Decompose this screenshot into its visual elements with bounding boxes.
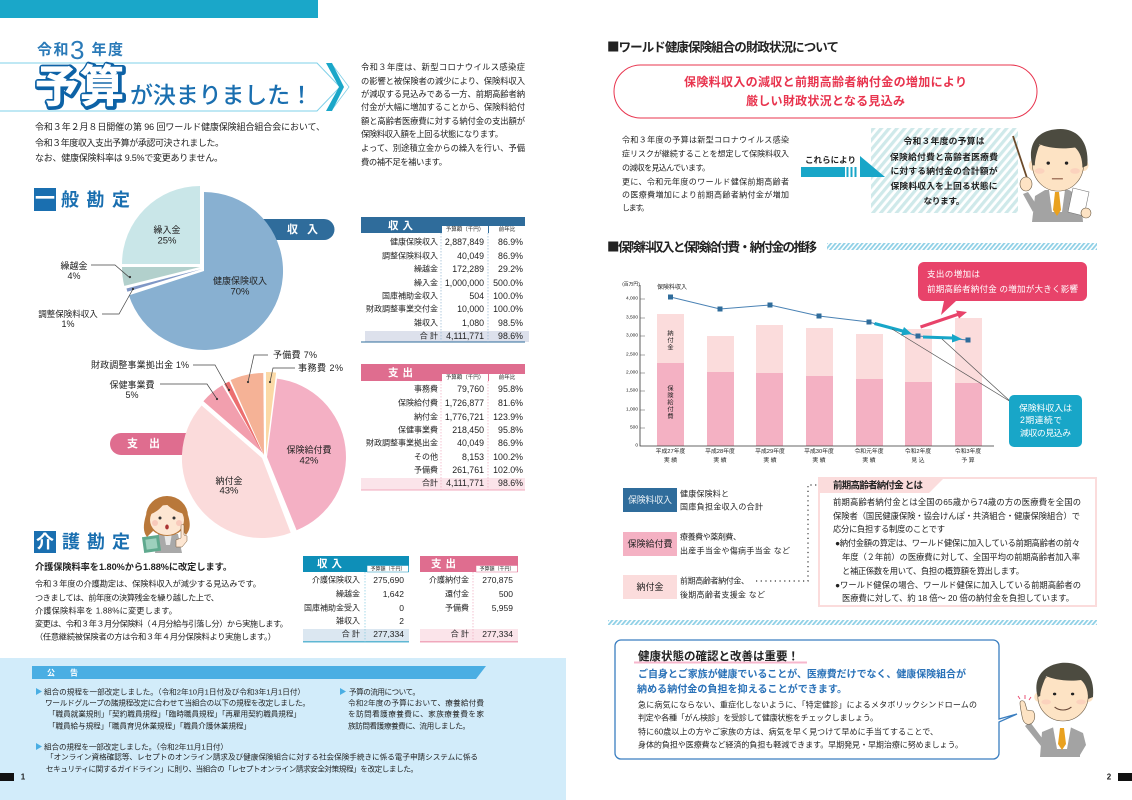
x axis labels: 実 績 <box>763 456 777 464</box>
bar labels: 保 <box>667 384 674 392</box>
right intro text: が減収する見込みである一方、前期高齢者納 <box>361 89 525 99</box>
intro text: 令和３年度収入支出予算が承認可決されました。 <box>35 137 224 148</box>
pie labels: expenditure: 保険給付費 <box>286 444 332 455</box>
pie labels: expenditure: 42% <box>299 456 319 466</box>
right intro text: 令和３年度は、新型コロナウイルス感染症 <box>361 62 525 72</box>
x axis labels: 平成28年度 <box>705 447 735 455</box>
legend: benefits term: 保険給付費 <box>628 538 672 549</box>
pie chart: revenue <box>38 186 283 350</box>
panel: public notices <box>0 658 566 800</box>
intro text <box>35 121 325 163</box>
table: expenditure: 95.8% <box>498 425 523 435</box>
pie labels: expenditure: 43% <box>219 486 239 496</box>
legend: contribution term: 納付金 <box>636 581 664 592</box>
x axis labels: 実 績 <box>862 456 876 464</box>
table: expenditure: 保険給付費 <box>398 398 438 408</box>
table: revenue: 合 計 <box>420 330 438 340</box>
heading: long-term care account: 護勘定 <box>62 532 130 552</box>
leader lines <box>892 329 1011 402</box>
table: care expenditure: 270,875 <box>482 575 513 585</box>
intro text: なお、健康保険料率は 9.5%で変更ありません。 <box>35 152 223 163</box>
axes: 2,000 <box>626 370 638 376</box>
bar labels: 付 <box>667 336 674 344</box>
finance text: 更に、令和元年度のワールド健保前期高齢者 <box>622 176 789 186</box>
panel: explanation of contribution <box>818 477 1096 606</box>
explanation title tab: 前期高齢者納付金 とは <box>833 480 923 492</box>
headline: yosan: 予算 <box>35 62 124 112</box>
axes: 1,500 <box>626 388 638 394</box>
icon: woman character <box>142 496 190 553</box>
table: revenue: 500.0% <box>493 278 523 288</box>
care text block <box>35 561 288 642</box>
axes: 4,000 <box>626 296 638 302</box>
heading: general account <box>34 188 130 211</box>
heading: general account: 般勘定 <box>61 190 130 210</box>
notice: rule revisions 1: ワールドグループの諸規程改定に合わせて当組合の以下の規程を改定しました。 <box>45 698 310 708</box>
hatched conclusion box: 令和３年度の予算は <box>904 135 985 146</box>
notice: rule revisions 2: セキュリティに関するガイドライン」に則り、当組合の「レセプトオンライン請求安全対策規程」を改定しました。 <box>46 764 418 774</box>
axes: 3,500 <box>626 314 638 320</box>
table: revenue: 4,111,771 <box>446 331 484 341</box>
axes: 1,000 <box>626 406 638 412</box>
right intro text: よって、別途積立金からの繰入を行い、予備 <box>361 143 525 153</box>
intro text: 令和３年２月８日開催の第 96 回ワールド健康保険組合組合会において、 <box>35 121 325 132</box>
title block <box>0 35 349 112</box>
arrow: as a result <box>801 155 885 177</box>
bar labels: 費 <box>667 412 674 420</box>
page number 1: 1 <box>21 772 26 782</box>
care text block: 介護保険料率を 1.88%に変更します。 <box>35 606 177 616</box>
table: expenditure: 予備費 <box>414 464 438 474</box>
table: expenditure: 前年比 <box>499 373 516 381</box>
pie labels: revenue: 25% <box>157 236 177 246</box>
notice: rule revisions 1: 「職員就業規則」「契約職員規程」「臨時職員規程」「再雇用契約職員規程」 <box>48 708 301 718</box>
callout body: 急に病気にならない、重症化しないように、「特定健診」によるメタボリックシンドロームの <box>638 700 977 710</box>
x axis labels: 平成29年度 <box>755 447 785 455</box>
notice: rule revisions 2: 「オンライン資格確認等、レセプトのオンライン請求及び健康保険組合に対する社会保険手続きに係る電子申請システムに係る <box>46 752 478 762</box>
chart: revenue and expense trend <box>622 262 1087 464</box>
table: care revenue: 277,334 <box>373 629 404 639</box>
arrow: as a result: これらにより <box>805 155 856 165</box>
notice: budget transfer: を訪問看護療養費に、家族療養費を家 <box>348 708 484 718</box>
table: revenue: 雑収入 <box>414 318 438 328</box>
table: revenue: 98.6% <box>498 331 523 341</box>
pie labels: expenditure <box>91 349 343 496</box>
legend: revenue term: 健康保険料と <box>680 488 729 498</box>
revenue line: 保険料収入 <box>657 283 687 291</box>
finance text: 症リスクが継続することを想定して保険料収入 <box>622 148 789 158</box>
pie labels: revenue: 4% <box>67 271 81 281</box>
axes: (百万円) <box>622 282 640 288</box>
page number 2 <box>1107 772 1132 782</box>
pie labels: expenditure: 財政調整事業拠出金 1% <box>91 359 189 370</box>
callout: revenue: 2期連続で <box>1020 414 1062 425</box>
hatched conclusion box: なります。 <box>924 196 964 206</box>
pie labels: revenue: 繰入金 <box>153 224 181 235</box>
page number 2: 2 <box>1107 772 1112 782</box>
x axis labels: 実 績 <box>713 456 727 464</box>
notice: budget transfer: 予算の流用について。 <box>349 686 420 696</box>
legend: contribution term: 前期高齢者納付金、 <box>680 576 749 586</box>
table: expenditure: 40,049 <box>457 438 484 448</box>
right intro text: 保険料収入額を上回る状態になります。 <box>361 129 503 139</box>
table: expenditure: 納付金 <box>414 412 438 422</box>
callout body: 判定や各種「がん検診」を受診して健康状態をチェックしましょう。 <box>638 712 878 722</box>
table: revenue: 40,049 <box>457 251 484 261</box>
finance text: の減収を見込んでいます。 <box>622 162 710 172</box>
table: revenue: 504 <box>469 291 484 301</box>
right intro text: 額と高齢者医療費に対する納付金の支出額が <box>361 116 526 126</box>
table: care revenue: 介護保険収入 <box>312 574 360 584</box>
right intro text <box>361 62 526 167</box>
notice: rule revisions 1 <box>36 686 310 730</box>
legend: contribution term <box>623 575 765 600</box>
table: revenue: 10,000 <box>457 304 484 314</box>
callout: revenue: 保険料収入は <box>1019 402 1072 413</box>
table: expenditure: 財政調整事業拠出金 <box>366 438 438 448</box>
axes <box>622 282 994 448</box>
axes: 500 <box>630 424 638 430</box>
legend: revenue term: 保険料収入 <box>628 494 672 505</box>
notice: rule revisions 1: 「職員給与規程」「職員育児休業規程」「職員介護休業規程」 <box>48 720 251 730</box>
callout title: 健康状態の確認と改善は重要！ <box>638 649 799 663</box>
table: revenue: 財政調整事業交付金 <box>366 304 438 314</box>
callout: health importance <box>615 640 1017 759</box>
table: care expenditure <box>420 556 518 642</box>
callout pill: red: 厳しい財政状況となる見込み <box>746 93 905 108</box>
table: care expenditure: 予備費 <box>445 602 469 612</box>
table: revenue: 1,000,000 <box>445 278 484 288</box>
table: care expenditure: 5,959 <box>492 603 513 613</box>
table: care expenditure: 277,334 <box>482 629 513 639</box>
notice: rule revisions 2 <box>36 742 478 774</box>
pie labels: expenditure: 5% <box>125 390 139 400</box>
legend: benefits term <box>623 532 790 556</box>
x axis labels: 平成27年度 <box>656 447 686 455</box>
x axis labels: 予 算 <box>961 456 975 464</box>
x axis labels: 令和元年度 <box>854 447 884 455</box>
table: care revenue: 予算額（千円） <box>370 566 406 572</box>
legend: benefits term: 出産手当金や傷病手当金 など <box>680 546 790 556</box>
table: expenditure: その他 <box>414 452 438 462</box>
notice: rule revisions 2: 組合の規程を一部改定しました。（令和2年11月1日付） <box>44 742 228 752</box>
explanation title tab <box>818 477 945 493</box>
table: care revenue: 収 入 <box>317 558 342 570</box>
expenditure pill: 支 出 <box>127 436 160 450</box>
finance text: の医療費増加により前期高齢者納付金が増加 <box>622 190 789 200</box>
explanation body: 応分に負担する制度のことです <box>833 524 945 534</box>
heading: long-term care account: 介 <box>36 532 54 552</box>
subtitle: fiscal year: 令和3 年度 <box>37 35 123 65</box>
legend: revenue term <box>623 488 763 512</box>
notice: budget transfer <box>340 686 484 730</box>
table: care expenditure: 支 出 <box>431 557 456 570</box>
explanation body: 前期高齢者納付金とは全国の65歳から74歳の方の医療費を全国の <box>833 497 1081 507</box>
table: revenue: 予算額（千円） <box>446 225 484 233</box>
callout: revenue: 減収の見込み <box>1020 427 1071 438</box>
axes: 3,000 <box>626 332 638 338</box>
headline: yosan: 予算 <box>36 64 125 112</box>
callout body: 身体的負担や医療費など経済的負担も軽減できます。早期発見・早期治療に努めましょう。 <box>638 740 963 750</box>
table: expenditure <box>361 364 525 490</box>
right intro text: 付金が大幅に増加することから、保険料給付 <box>361 102 525 112</box>
callout lead: 納める納付金の負担を抑えることができます。 <box>637 682 847 696</box>
bars: stacked <box>657 314 982 446</box>
pie labels: expenditure: 納付金 <box>215 475 243 486</box>
callout lead <box>637 668 966 696</box>
table: care revenue: 275,690 <box>373 575 404 585</box>
bar labels: 付 <box>667 406 674 414</box>
table: expenditure: 86.9% <box>498 438 523 448</box>
explanation body: ●ワールド健保の場合、ワールド健保に加入している前期高齢者の <box>835 580 1081 590</box>
callout body <box>638 700 977 750</box>
notice: budget transfer: 令和2年度の予算において、療養給付費 <box>348 698 484 708</box>
table: expenditure: 79,760 <box>457 384 484 394</box>
explanation body: と補正係数を用いて、負担の概算額を算出します。 <box>842 566 1024 576</box>
table: expenditure: 81.6% <box>498 398 523 408</box>
table: expenditure: 支 出 <box>388 366 413 379</box>
revenue line <box>657 283 970 342</box>
callout: revenue <box>1009 395 1082 447</box>
heading: general account: 一 <box>35 188 55 210</box>
pie labels: expenditure: 事務費 2% <box>298 362 343 373</box>
table: expenditure: 1,726,877 <box>445 398 484 408</box>
x axis labels: 令和2年度 <box>905 447 931 455</box>
table: expenditure: 1,776,721 <box>445 412 484 422</box>
x axis labels: 実 績 <box>812 456 826 464</box>
arrow: spending increase <box>920 310 967 328</box>
table: revenue: 国庫補助金収入 <box>382 290 438 300</box>
heading: finances: ■ワールド健康保険組合の財政状況について <box>607 36 839 56</box>
table: care expenditure: 還付金 <box>445 588 469 598</box>
bar labels <box>667 330 674 420</box>
bar labels: 金 <box>667 344 674 352</box>
pie labels: revenue: 調整保険料収入 <box>38 309 98 319</box>
x axis labels: 実 績 <box>664 456 677 464</box>
explanation body: 保険者（国民健康保険・協会けんぽ・共済組合・健康保険組合）で <box>833 511 1080 521</box>
callout pill: red: 保険料収入の減収と前期高齢者納付金の増加により <box>684 74 967 89</box>
revenue pill <box>262 219 334 240</box>
explanation body <box>833 497 1081 603</box>
legend: revenue term: 国庫負担金収入の合計 <box>680 502 763 512</box>
notice: budget transfer: 族訪問看護療養費に、流用しました。 <box>348 720 470 730</box>
care text block: 変更は、令和３年３月分保険料（４月分給与引落し分）から実施します。 <box>35 618 288 628</box>
hatched conclusion box: 保険給付費と高齢者医療費 <box>890 151 998 162</box>
finance text <box>622 134 789 212</box>
table: care revenue <box>303 556 409 642</box>
banner arrow outline <box>0 63 349 111</box>
table: care expenditure: 合 計 <box>451 628 469 638</box>
top colour bar <box>0 0 318 18</box>
table: care expenditure: 500 <box>499 589 513 599</box>
table: revenue: 前年比 <box>499 225 516 233</box>
table: expenditure: 95.8% <box>498 384 523 394</box>
table: care revenue: 0 <box>399 603 404 613</box>
hatched conclusion box: 保険料収入を上回る状態に <box>890 180 998 191</box>
table: care revenue: 雑収入 <box>336 616 360 626</box>
revenue pill: 収 入 <box>287 223 318 236</box>
x axis labels: 令和3年度 <box>955 447 981 455</box>
table: revenue: 86.9% <box>498 237 523 247</box>
explanation body: ●納付金額の算定は、ワールド健保に加入している前期高齢者の前々 <box>835 538 1080 548</box>
pie labels: expenditure: 予備費 7% <box>273 349 317 360</box>
table: expenditure: 102.0% <box>493 465 523 475</box>
pie labels: expenditure: 保健事業費 <box>109 379 155 390</box>
notice banner <box>32 666 486 679</box>
care rate statement: 介護保険料率を1.80%から1.88%に改定します。 <box>35 561 232 572</box>
bar labels: 納 <box>667 330 674 338</box>
hatched conclusion box <box>871 128 1018 213</box>
table: expenditure: 8,153 <box>462 452 484 462</box>
axes: 0 <box>635 442 638 448</box>
expenditure pill <box>110 433 190 455</box>
explanation body: 年度（２年前）の医療費に対して、全国平均の前期高齢者加入率 <box>842 552 1080 562</box>
callout: spending <box>918 262 1087 315</box>
table: revenue: 収 入 <box>388 220 414 232</box>
heading: long-term care account <box>34 531 130 553</box>
care text block: 令和３年度の介護勘定は、保険料収入が減少する見込みです。 <box>35 578 261 588</box>
callout: spending: 前期高齢者納付金 の増加が大きく影響 <box>927 284 1078 294</box>
x axis labels: 平成30年度 <box>804 447 834 455</box>
table: expenditure: 合計 <box>422 478 438 488</box>
headline: remainder: が決まりました！ <box>130 82 313 108</box>
x axis labels: 見 込 <box>911 456 925 464</box>
finance text: 令和３年度の予算は新型コロナウイルス感染 <box>622 134 789 144</box>
table: revenue: 86.9% <box>498 251 523 261</box>
bar labels: 険 <box>667 392 674 400</box>
table: expenditure: 保健事業費 <box>398 424 438 434</box>
table: revenue: 2,887,849 <box>445 237 484 247</box>
table: revenue: 29.2% <box>498 264 523 274</box>
table: expenditure: 予算額（千円） <box>446 373 484 381</box>
arrow: revenue decline <box>874 322 962 342</box>
legend: contribution term: 後期高齢者支援金 など <box>680 590 765 600</box>
icon: man pointing up <box>1018 663 1093 757</box>
pie labels: revenue: 繰越金 <box>60 260 88 271</box>
table: care revenue: 合 計 <box>342 628 360 638</box>
table: expenditure: 218,450 <box>452 425 484 435</box>
bar labels: 給 <box>667 398 674 406</box>
callout lead: ご自身とご家族が健康でいることが、医療費だけでなく、健康保険組合が <box>638 668 966 680</box>
pie labels: revenue <box>38 224 267 329</box>
callout body: 特に60歳以上の方やご家族の方は、病気を早く見つけて早めに手当てすることで、 <box>638 726 938 736</box>
callout pill: red <box>614 65 1037 118</box>
table: expenditure: 123.9% <box>493 412 523 422</box>
table: care revenue: 国庫補助金受入 <box>304 602 360 612</box>
explanation body: 医療費に対して、約 18 倍～ 20 倍の納付金を負担しています。 <box>842 593 1074 603</box>
table: care expenditure: 介護納付金 <box>429 574 469 584</box>
pie labels: revenue: 70% <box>230 286 250 298</box>
callout: spending: 支出の増加は <box>927 269 980 279</box>
axes: 2,500 <box>626 352 638 358</box>
pie labels: revenue: 健康保険収入 <box>213 275 267 286</box>
table: expenditure: 4,111,771 <box>446 478 484 488</box>
table: revenue: 98.5% <box>498 318 523 328</box>
hatched conclusion box: に対する納付金の合計額が <box>890 165 998 176</box>
table: revenue: 繰入金 <box>414 278 438 288</box>
notice banner: 公 告 <box>47 668 78 678</box>
table: revenue: 繰越金 <box>414 264 438 274</box>
table: revenue: 1,080 <box>462 318 484 328</box>
page number 1 <box>0 772 26 782</box>
right intro text: 費の補不足を補います。 <box>361 157 447 167</box>
notice: rule revisions 1: 組合の規程を一部改定しました。（令和2年10月1日付及び令和3年1月1日付） <box>44 686 305 696</box>
right intro text: の影響と被保険者の減少により、保険料収入 <box>361 76 526 86</box>
heading: trend: ■保険料収入と保険給付費・納付金の推移 <box>607 236 817 256</box>
care text block: （任意継続被保険者の方は令和３年４月分保険料より実施します。） <box>35 632 276 642</box>
pie chart: expenditure <box>91 349 346 538</box>
table: revenue: 健康保険収入 <box>390 236 438 246</box>
table: revenue: 100.0% <box>493 304 523 314</box>
x axis labels <box>656 447 981 464</box>
table: care revenue: 繰越金 <box>336 588 360 598</box>
table: revenue: 調整保険料収入 <box>382 250 438 260</box>
care text block: つきましては、前年度の決算残金を繰り越した上で、 <box>35 592 219 602</box>
pie labels: revenue: 1% <box>61 319 75 329</box>
finance text: します。 <box>622 204 649 212</box>
table: revenue: 100.0% <box>493 291 523 301</box>
legend: benefits term: 療養費や薬剤費、 <box>680 532 741 542</box>
table: care revenue: 1,642 <box>383 589 404 599</box>
table: revenue: 172,289 <box>452 264 484 274</box>
table: expenditure: 100.2% <box>493 452 523 462</box>
table: expenditure: 261,761 <box>452 465 484 475</box>
table: care expenditure: 予算額（千円） <box>479 566 515 572</box>
table: revenue <box>361 217 529 342</box>
icon: man with pointer <box>1013 129 1091 222</box>
table: expenditure: 98.6% <box>498 478 523 488</box>
table: expenditure: 事務費 <box>414 384 438 394</box>
table: care revenue: 2 <box>399 616 404 626</box>
